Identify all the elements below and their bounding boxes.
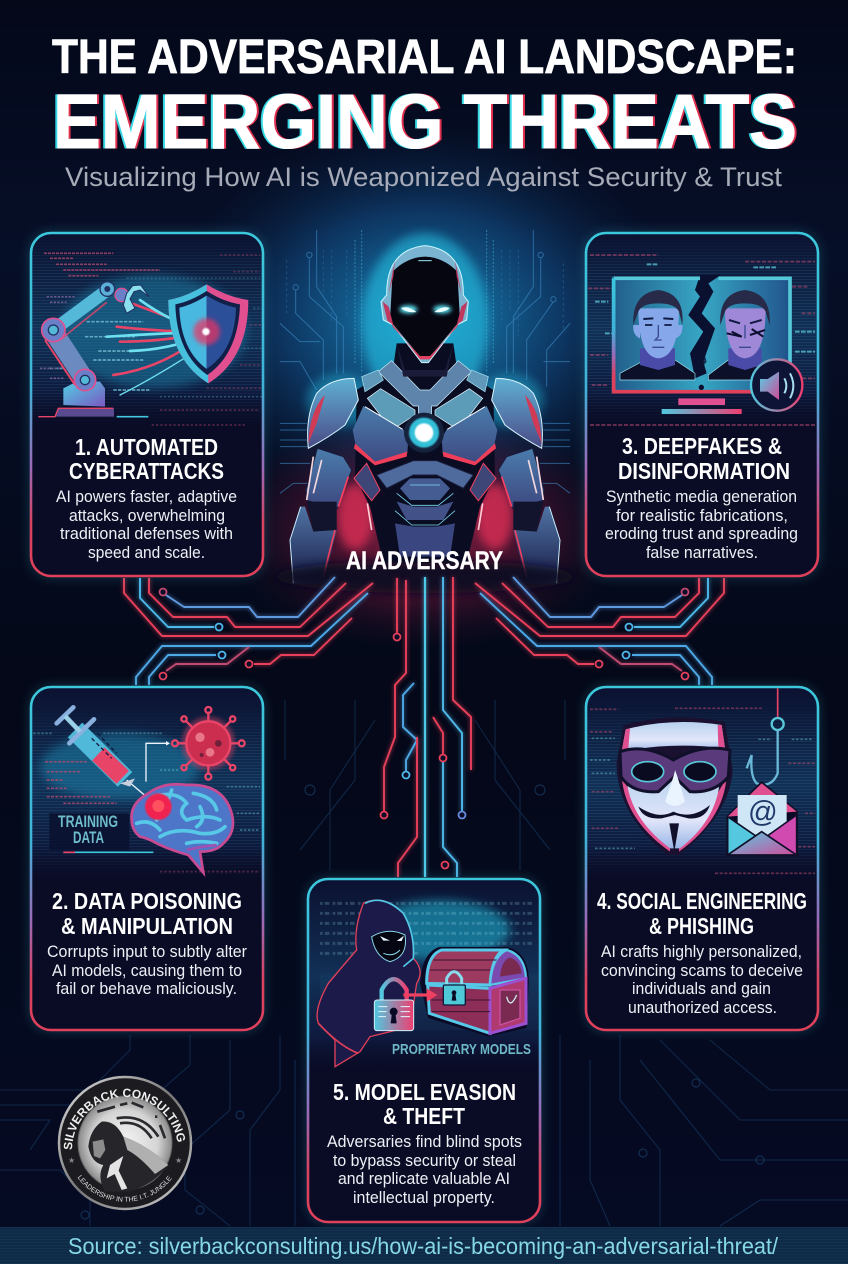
chest (422, 948, 527, 1035)
eyes (399, 305, 451, 313)
footer source bar (0, 1227, 848, 1264)
gorilla silhouette (88, 1103, 168, 1192)
halo (357, 228, 493, 374)
heading (618, 433, 790, 484)
heading (69, 434, 224, 484)
label: AI adversary: AI ADVERSARY (346, 547, 503, 575)
helmet (381, 246, 468, 363)
body text: traditional defenses with (60, 525, 233, 543)
rays (105, 298, 184, 396)
label: training data (58, 812, 118, 847)
illustration: cracked monitor with faces (586, 233, 818, 428)
body text: convincing scams to deceive (601, 962, 803, 980)
padlock (382, 979, 407, 1002)
speaker (751, 359, 802, 411)
torso (355, 343, 495, 563)
body text: false narratives. (646, 544, 758, 562)
body text (56, 488, 237, 562)
illustration: mask, hook and envelope: @ (748, 795, 778, 828)
syringe (126, 780, 144, 795)
body text: Corrupts input to subtly alter (47, 943, 247, 961)
logo: Silverback Consulting badge (58, 1076, 192, 1210)
pauldrons (308, 378, 358, 448)
panel 3: deepfakes and disinformation (585, 232, 819, 577)
heading: & MANIPULATION (61, 913, 233, 939)
arrow (403, 990, 428, 1000)
circuit traces (124, 577, 724, 877)
body text: speed and scale. (88, 544, 205, 562)
chest lower plates (353, 406, 408, 464)
body text: individuals and gain (632, 980, 771, 998)
heading (333, 1079, 516, 1129)
illustration: mask, hook and envelope (586, 687, 818, 882)
panel 2: data poisoning (30, 686, 264, 1031)
panel 5: model evasion and theft (307, 878, 541, 1223)
illustration: robot arm attacking shield (31, 233, 263, 428)
arm (63, 382, 105, 407)
subtitle: Visualizing How AI is Weaponized Against Security & Trust (65, 162, 783, 192)
heading: 1. AUTOMATED (75, 434, 218, 460)
abdomen (377, 461, 473, 488)
hooded figure (317, 900, 420, 1067)
title line 2: EMERGING THREATS (55, 79, 799, 165)
body text (327, 1133, 522, 1207)
panel 1: automated cyberattacks (30, 232, 264, 577)
left face (620, 290, 695, 380)
lower fade (275, 560, 575, 593)
heading (597, 888, 807, 939)
brain (132, 784, 233, 873)
collar (378, 361, 472, 417)
body text: AI powers faster, adaptive (56, 488, 237, 506)
illustration: syringe, virus and brain (31, 687, 263, 882)
title line 2: EMERGING THREATS (53, 79, 797, 165)
body text: and replicate valuable AI (338, 1170, 510, 1188)
arc reactor (404, 413, 444, 453)
badge text: SILVERBACK CONSULTING (64, 1088, 185, 1150)
body text: Synthetic media generation (606, 488, 797, 506)
heading: & PHISHING (649, 913, 754, 939)
badge stars (68, 1156, 182, 1165)
heading: CYBERATTACKS (69, 458, 224, 484)
heading: 3. DEEPFAKES & (622, 433, 782, 459)
title (51, 31, 799, 192)
heading: 2. DATA POISONING (52, 888, 242, 914)
central figure: AI adversary (275, 230, 575, 593)
body text: attacks, overwhelming (69, 507, 225, 525)
envelope (728, 783, 797, 855)
virus (172, 707, 245, 780)
right face (708, 290, 770, 380)
chest lock (447, 972, 462, 985)
badge stars: ★ (175, 1156, 182, 1165)
body text: fail or behave maliciously. (56, 980, 237, 998)
mask (618, 719, 731, 853)
label: proprietary models: PROPRIETARY MODELS (392, 1041, 531, 1058)
training data label box (49, 813, 129, 850)
body text: eroding trust and spreading (605, 525, 798, 543)
title line 2: EMERGING THREATS (51, 79, 795, 165)
heading: & THEFT (383, 1103, 465, 1129)
heading: 5. MODEL EVASION (333, 1079, 516, 1105)
arrow (146, 743, 166, 782)
heading: DISINFORMATION (618, 458, 790, 484)
body text: AI models, causing them to (52, 962, 242, 980)
body text (47, 943, 247, 998)
label: training data: TRAINING (58, 812, 118, 831)
illustration: hooded thief and treasure chest (308, 879, 540, 1074)
arms (306, 448, 352, 508)
heading (52, 888, 242, 939)
badge tagline: LEADERSHIP IN THE I.T. JUNGLE (78, 1174, 172, 1202)
body text (605, 488, 798, 562)
circuit backdrop (280, 230, 570, 493)
badge stars: ★ (68, 1156, 75, 1165)
body text (601, 943, 803, 1017)
body text: unauthorized access. (628, 999, 777, 1017)
label: training data: DATA (73, 828, 104, 847)
panel 4: social engineering (585, 686, 819, 1031)
shield (168, 284, 248, 383)
body text: Adversaries find blind spots (327, 1133, 522, 1151)
body text: for realistic fabrications, (616, 507, 788, 525)
source text: Source: silverbackconsulting.us/how-ai-is-becoming-an-adversarial-threat/ (68, 1233, 779, 1259)
body text: intellectual property. (353, 1189, 495, 1207)
body text: to bypass security or steal (333, 1152, 516, 1170)
chest upper plates (367, 389, 415, 430)
body text: AI crafts highly personalized, (601, 943, 802, 961)
hook (776, 688, 778, 717)
